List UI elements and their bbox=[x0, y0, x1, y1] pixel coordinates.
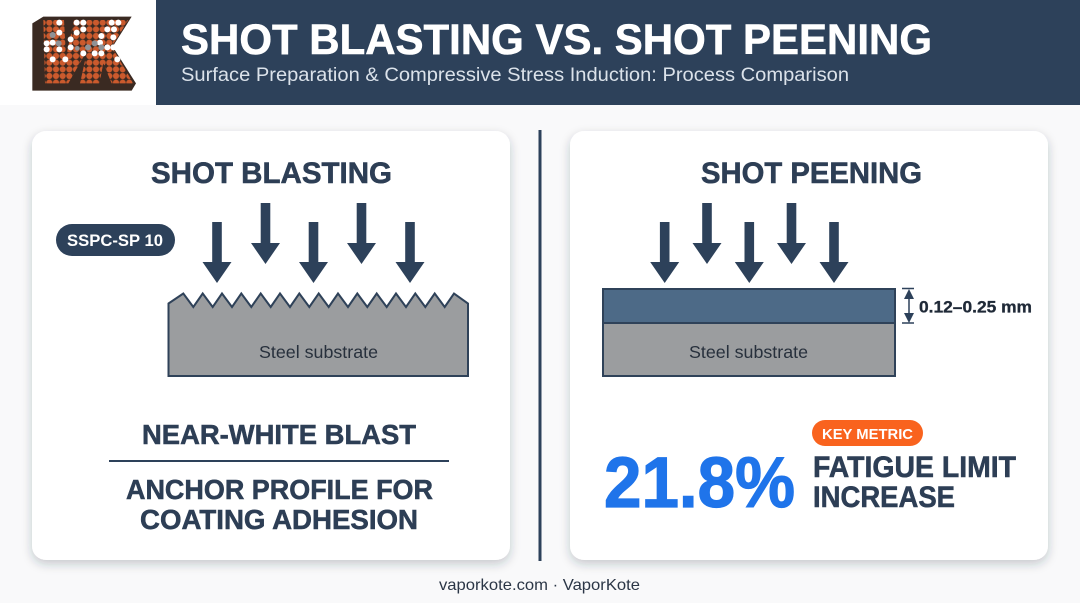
header banner bbox=[156, 0, 1080, 105]
dimension: layer depth: 0.12–0.25 mm bbox=[919, 298, 1032, 316]
panel: shot blasting bbox=[32, 131, 510, 560]
label: near-white blast: NEAR-WHITE BLAST bbox=[142, 419, 416, 450]
icon: impact arrows bbox=[650, 203, 848, 283]
label: fatigue limit increase: INCREASE bbox=[813, 481, 955, 514]
heading: shot blasting: SHOT BLASTING bbox=[151, 157, 392, 190]
label: fatigue limit increase bbox=[813, 451, 1016, 514]
label: fatigue limit increase: FATIGUE LIMIT bbox=[813, 451, 1016, 484]
label: anchor profile: ANCHOR PROFILE FOR bbox=[126, 474, 433, 505]
subtitle: Surface Preparation & Compressive Stress Induction: Process Comparison bbox=[181, 64, 849, 86]
footer: vaporkote.com · VaporKote bbox=[439, 577, 640, 594]
badge: key metric: KEY METRIC bbox=[822, 426, 913, 443]
diagram: compressive layer on steel substrate bbox=[603, 289, 895, 376]
badge: SSPC-SP 10: SSPC-SP 10 bbox=[67, 232, 163, 250]
diagram: compressive layer on steel substrate: Steel substrate bbox=[689, 342, 808, 362]
label: anchor profile: COATING ADHESION bbox=[140, 504, 418, 535]
badge: SSPC-SP 10 bbox=[56, 224, 175, 256]
label: anchor profile bbox=[126, 474, 433, 535]
icon: impact arrows bbox=[202, 203, 424, 283]
heading: shot peening: SHOT PEENING bbox=[701, 157, 922, 190]
panel: shot peening bbox=[570, 131, 1048, 560]
title: SHOT BLASTING VS. SHOT PEENING bbox=[181, 16, 932, 64]
logo bbox=[0, 0, 156, 105]
badge: key metric bbox=[812, 420, 923, 446]
metric: 21.8%: 21.8% bbox=[604, 444, 795, 523]
diagram: roughened steel substrate bbox=[168, 294, 468, 376]
dimension: layer depth bbox=[902, 288, 1032, 323]
diagram: roughened steel substrate: Steel substrate bbox=[259, 342, 378, 362]
